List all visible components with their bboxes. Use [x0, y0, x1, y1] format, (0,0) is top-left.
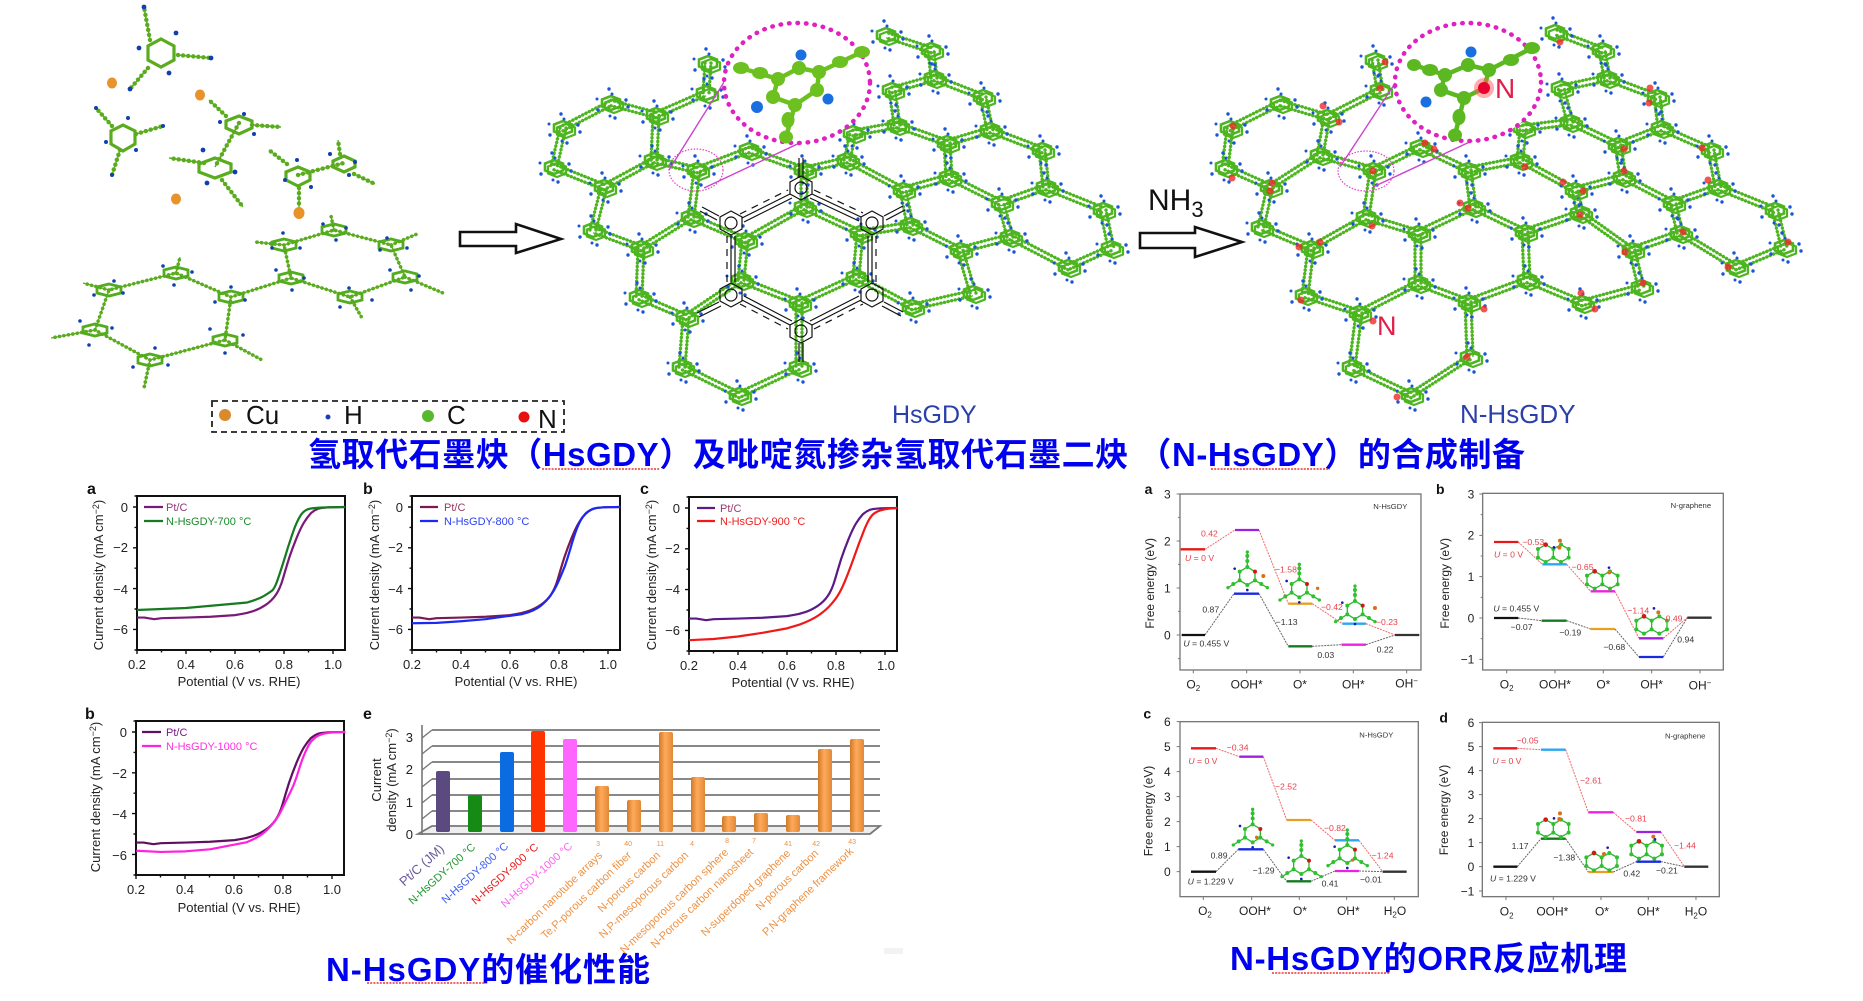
chart c: N-HsGDY-900: −2 [665, 541, 680, 556]
chart e: 3D bar chart: −2 [384, 733, 394, 743]
reaction arrow 2 [1140, 227, 1242, 257]
energy diagram d: N-graphene U=1.229 V: 4 [1468, 764, 1475, 778]
chart a: N-HsGDY-700: 0.8 [275, 657, 293, 672]
energy diagram a: N-HsGDY U=0.455 V: −0.42 [1321, 602, 1343, 612]
chart b (lower): N-HsGDY-1000: N-HsGDY-1000 °C [166, 741, 257, 753]
energy diagram a: N-HsGDY U=0.455 V: U = 0 V [1185, 553, 1214, 563]
chart a: N-HsGDY-700: 0.2 [128, 657, 146, 672]
chart b: N-HsGDY-800: 1.0 [599, 657, 617, 672]
energy diagram d: N-graphene U=1.229 V: 5 [1468, 740, 1475, 754]
energy diagram b: N-graphene U=0.455 V: 2 [1509, 684, 1514, 693]
chart b (lower): N-HsGDY-1000: 0.4 [176, 882, 194, 897]
chart a: N-HsGDY-700: −4 [113, 582, 128, 597]
chart e category labels: N-porous carbon [754, 848, 821, 913]
energy diagram d: N-graphene U=1.229 V: Free energy (eV) [1437, 765, 1451, 855]
HsGDY network [538, 19, 1130, 412]
energy diagram c: N-HsGDY U=1.229 V: −1.29 [1253, 865, 1275, 875]
chart b (lower): N-HsGDY-1000: −2 [112, 766, 127, 781]
energy diagram c: N-HsGDY U=1.229 V: c [1143, 706, 1151, 722]
energy diagram b: N-graphene U=0.455 V: N-graphene [1671, 501, 1711, 510]
energy diagram d: N-graphene U=1.229 V: 1 [1468, 836, 1475, 850]
chart e category labels: 42 [812, 841, 820, 848]
chart e: 3D bar chart: density (mA cm [384, 743, 399, 832]
energy diagram d: N-graphene U=1.229 V: −1.38 [1553, 852, 1575, 862]
chart b (lower): N-HsGDY-1000: Current density (mA cm [88, 736, 103, 872]
energy diagram b: N-graphene U=0.455 V: 0.49 [1666, 614, 1683, 624]
chart c: N-HsGDY-900: Potential (V vs. RHE) [732, 675, 854, 690]
chart b: N-HsGDY-800: 0.6 [501, 657, 519, 672]
energy diagram d: N-graphene U=1.229 V: −2.61 [1580, 775, 1602, 785]
main title: 氢取代石墨炔（HsGDY）及吡啶氮掺杂氢取代石墨二炔 （N-HsGDY）的合成制备 [308, 436, 1525, 473]
chart b (lower): N-HsGDY-1000: b [85, 706, 95, 723]
energy diagram c: N-HsGDY U=1.229 V: 3 [1164, 790, 1171, 804]
chart e category labels [396, 838, 856, 956]
chart b: N-HsGDY-800: −2 [388, 540, 403, 555]
chart e category labels: N-HsGDY-1000 °C [499, 840, 575, 910]
black bond skeleton overlay [697, 158, 905, 362]
energy diagram c: N-HsGDY U=1.229 V: −0.82 [1324, 823, 1346, 833]
energy diagram d: N-graphene U=1.229 V [1437, 710, 1719, 920]
energy diagram c: N-HsGDY U=1.229 V: U = 1.229 V [1188, 876, 1234, 886]
faint smudge [884, 948, 903, 954]
chart b (lower): N-HsGDY-1000: 1.0 [323, 882, 341, 897]
chart e: 3D bar chart: 0 [406, 827, 413, 842]
energy diagram c: N-HsGDY U=1.229 V: 1 [1164, 840, 1171, 854]
energy diagram a: N-HsGDY U=0.455 V: 0.03 [1317, 650, 1334, 660]
energy diagram b: N-graphene U=0.455 V: −1 [1461, 653, 1475, 667]
energy diagram d: N-graphene U=1.229 V: d [1439, 710, 1448, 726]
chart b: N-HsGDY-800: Current density (mA cm [367, 514, 382, 650]
chart b: N-HsGDY-800: N-HsGDY-800 °C [444, 516, 529, 528]
chart c: N-HsGDY-900: −4 [665, 582, 680, 597]
energy diagram d: N-graphene U=1.229 V: 3 [1468, 788, 1475, 802]
chart a: N-HsGDY-700: Current density (mA cm [91, 514, 106, 650]
energy diagram c: N-HsGDY U=1.229 V: 2 [1164, 815, 1171, 829]
chart c: N-HsGDY-900 [640, 481, 897, 690]
energy diagram b: N-graphene U=0.455 V: 1 [1468, 570, 1475, 584]
chart e category labels: 7 [752, 838, 756, 845]
energy diagram b: N-graphene U=0.455 V: −0.07 [1511, 622, 1533, 632]
energy diagram c: N-HsGDY U=1.229 V: 6 [1164, 715, 1171, 729]
energy diagram b: N-graphene U=0.455 V: −0.65 [1572, 562, 1594, 572]
energy diagram d: N-graphene U=1.229 V: O [1698, 905, 1707, 919]
energy diagram d: N-graphene U=1.229 V: O [1500, 905, 1509, 919]
chart a: N-HsGDY-700: Pt/C [166, 502, 187, 514]
chart e: 3D bar chart: ) [384, 728, 399, 733]
chart a: N-HsGDY-700: 0 [121, 500, 128, 515]
energy diagram a: N-HsGDY U=0.455 V: − [1413, 676, 1418, 685]
energy diagram c: N-HsGDY U=1.229 V: O [1397, 904, 1406, 918]
reaction arrow 1 [460, 224, 561, 253]
energy diagram c: N-HsGDY U=1.229 V: −0.34 [1227, 743, 1249, 753]
chart e category labels: 4 [690, 841, 694, 848]
energy diagram b: N-graphene U=0.455 V: Free energy (eV) [1438, 538, 1452, 629]
chart b (lower): N-HsGDY-1000: ) [88, 722, 103, 726]
chart e: 3D bar chart [363, 706, 880, 956]
chart b: N-HsGDY-800: Pt/C [444, 502, 465, 514]
legend box: atoms [212, 400, 564, 434]
legend box: atoms: Cu [246, 400, 279, 430]
chart c: N-HsGDY-900: ) [644, 500, 659, 504]
energy diagram b: N-graphene U=0.455 V: 0 [1468, 611, 1475, 625]
zoom callout: N-HsGDY monomer: N [1495, 73, 1515, 104]
chart b: N-HsGDY-800: 0.2 [403, 657, 421, 672]
energy diagram a: N-HsGDY U=0.455 V: OH* [1342, 677, 1365, 691]
NH3 reagent label: 3 [1191, 197, 1204, 222]
chart e gridlines and floor [418, 725, 880, 835]
chart b (lower): N-HsGDY-1000: 0.6 [225, 882, 243, 897]
chart a: N-HsGDY-700: Potential (V vs. RHE) [178, 674, 300, 689]
chart e category labels: Te,P-porous carbon fiber [539, 849, 634, 942]
label: N-HsGDY: N-HsGDY [1460, 399, 1576, 429]
chart e: 3D bar chart: Current [369, 758, 384, 802]
chart e category labels: 3 [596, 841, 600, 848]
energy diagram a: N-HsGDY U=0.455 V: N-HsGDY [1373, 502, 1407, 511]
chart e category labels: N-HsGDY-800 °C [440, 840, 511, 906]
heading: catalytic performance: N-HsGDY的催化性能 [326, 951, 650, 988]
chart b: N-HsGDY-800 [363, 481, 620, 689]
chart e category labels: N-mesoporous carbon sphere [618, 847, 731, 956]
chart e category labels: N-porous carbon [596, 850, 663, 915]
energy diagram a: N-HsGDY U=0.455 V: 2 [1196, 684, 1201, 693]
energy diagram c: N-HsGDY U=1.229 V: O* [1293, 904, 1307, 918]
energy diagram a: N-HsGDY U=0.455 V: O* [1293, 677, 1307, 691]
energy diagram d: N-graphene U=1.229 V: 1.17 [1512, 841, 1529, 851]
chart e category labels: N-Porous carbon nanosheet [649, 847, 756, 951]
chart b (lower): N-HsGDY-1000 [85, 706, 345, 915]
energy diagram c: N-HsGDY U=1.229 V: 0 [1164, 865, 1171, 879]
legend box: atoms: H [344, 400, 363, 430]
chart b (lower): N-HsGDY-1000: Potential (V vs. RHE) [178, 900, 300, 915]
energy diagram b: N-graphene U=0.455 V: −0.68 [1603, 642, 1625, 652]
energy diagram c: N-HsGDY U=1.229 V: 4 [1164, 765, 1171, 779]
energy diagram c: N-HsGDY U=1.229 V: O [1198, 904, 1207, 918]
energy diagram b: N-graphene U=0.455 V: −0.19 [1559, 628, 1581, 638]
chart e: 3D bar chart: 1 [406, 795, 413, 810]
energy diagram d: N-graphene U=1.229 V: 2 [1468, 812, 1475, 826]
energy diagram a: N-HsGDY U=0.455 V: −1.13 [1276, 617, 1298, 627]
energy diagram c: N-HsGDY U=1.229 V: −0.01 [1360, 874, 1382, 884]
energy diagram b: N-graphene U=0.455 V: U = 0.455 V [1493, 603, 1540, 613]
chart b (lower): N-HsGDY-1000: 0 [120, 725, 127, 740]
energy diagram a: N-HsGDY U=0.455 V: −1.58 [1275, 565, 1297, 575]
chart c: N-HsGDY-900: 0.2 [680, 658, 698, 673]
chart b: N-HsGDY-800: 0.4 [452, 657, 470, 672]
chart b: N-HsGDY-800: Potential (V vs. RHE) [455, 674, 577, 689]
energy diagram d: N-graphene U=1.229 V: −0.05 [1517, 736, 1539, 746]
chart e category labels: N-HsGDY-700 °C [407, 841, 478, 907]
energy diagram c: N-HsGDY U=1.229 V: −2.52 [1275, 781, 1297, 791]
energy diagram b: N-graphene U=0.455 V: O [1500, 677, 1509, 691]
chart b: N-HsGDY-800: 0.8 [550, 657, 568, 672]
energy diagram d: N-graphene U=1.229 V: −1.44 [1674, 841, 1696, 851]
energy diagram c: N-HsGDY U=1.229 V: 5 [1164, 740, 1171, 754]
chart c: N-HsGDY-900: −6 [665, 623, 680, 638]
chart b: N-HsGDY-800: −4 [388, 582, 403, 597]
chart b (lower): N-HsGDY-1000: Pt/C [166, 727, 187, 739]
chart c: N-HsGDY-900: 0.4 [729, 658, 747, 673]
energy diagram d: N-graphene U=1.229 V: OOH* [1536, 905, 1569, 919]
chart e: 3D bar chart: 2 [406, 762, 413, 777]
energy diagram b: N-graphene U=0.455 V [1436, 481, 1723, 693]
zoom callout: HsGDY monomer [669, 23, 870, 191]
energy diagram b: N-graphene U=0.455 V: − [1707, 678, 1712, 687]
N-HsGDY network [1210, 16, 1803, 412]
chart c: N-HsGDY-900: c [640, 481, 649, 498]
energy diagram c: N-HsGDY U=1.229 V: OH* [1337, 904, 1360, 918]
chart b (lower): N-HsGDY-1000: −6 [112, 848, 127, 863]
energy diagram a: N-HsGDY U=0.455 V [1143, 481, 1421, 693]
energy diagram d: N-graphene U=1.229 V: −0.21 [1656, 865, 1678, 875]
energy diagram a: N-HsGDY U=0.455 V: Free energy (eV) [1143, 538, 1157, 629]
chart a: N-HsGDY-700: −2 [91, 504, 101, 514]
chart e category labels: N,P-mesoporous carbon [597, 850, 691, 941]
chart b: N-HsGDY-800: 0 [396, 500, 403, 515]
energy diagram d: N-graphene U=1.229 V: N-graphene [1665, 732, 1705, 741]
energy diagram c: N-HsGDY U=1.229 V: 2 [1207, 911, 1212, 920]
zoom callout: N-HsGDY monomer [1338, 23, 1541, 191]
NH3 reagent label: NH [1148, 184, 1191, 217]
chart c: N-HsGDY-900: 0.8 [827, 658, 845, 673]
energy diagram b: N-graphene U=0.455 V: OOH* [1539, 677, 1571, 691]
energy diagram d: N-graphene U=1.229 V: U = 0 V [1492, 756, 1522, 766]
chart b: N-HsGDY-800: −2 [367, 504, 377, 514]
energy diagram c: N-HsGDY U=1.229 V: H [1384, 904, 1392, 918]
chart b (lower): N-HsGDY-1000: 0.8 [274, 882, 292, 897]
energy diagram c: N-HsGDY U=1.229 V: 0.89 [1211, 850, 1228, 860]
energy diagram a: N-HsGDY U=0.455 V: 1 [1164, 581, 1171, 595]
chart a: N-HsGDY-700: −2 [113, 540, 128, 555]
energy diagram a: N-HsGDY U=0.455 V: −0.23 [1376, 617, 1398, 627]
heading: ORR mechanism: N-HsGDY的ORR反应机理 [1230, 940, 1627, 977]
chart b: N-HsGDY-800: ) [367, 500, 382, 504]
chart b: N-HsGDY-800: b [363, 481, 373, 498]
energy diagram a: N-HsGDY U=0.455 V: 0 [1164, 628, 1171, 642]
label: N atom: N [1377, 311, 1396, 341]
chart c: N-HsGDY-900: 1.0 [877, 658, 895, 673]
energy diagram d: N-graphene U=1.229 V: 0 [1468, 860, 1475, 874]
energy diagram c: N-HsGDY U=1.229 V: Free energy (eV) [1142, 766, 1156, 856]
energy diagram b: N-graphene U=0.455 V: 0.94 [1677, 635, 1694, 645]
legend box: atoms: C [447, 400, 466, 430]
energy diagram b: N-graphene U=0.455 V: OH [1689, 678, 1707, 692]
chart b (lower): N-HsGDY-1000: −2 [88, 726, 98, 736]
energy diagram a: N-HsGDY U=0.455 V: 0.22 [1377, 644, 1394, 654]
energy diagram d: N-graphene U=1.229 V: 2 [1693, 911, 1698, 920]
energy diagram a: N-HsGDY U=0.455 V: O [1186, 677, 1196, 691]
energy diagram a: N-HsGDY U=0.455 V: 3 [1164, 487, 1171, 501]
energy diagram c: N-HsGDY U=1.229 V: N-HsGDY [1359, 731, 1393, 740]
chart c: N-HsGDY-900: Pt/C [720, 503, 741, 515]
chart e: 3D bar chart: 3 [406, 730, 413, 745]
oligomer chain [51, 216, 443, 388]
energy diagram b: N-graphene U=0.455 V: −1.14 [1627, 605, 1649, 615]
energy diagram b: N-graphene U=0.455 V: U = 0 V [1494, 549, 1523, 559]
energy diagram a: N-HsGDY U=0.455 V: 0.87 [1202, 605, 1219, 615]
chart e category labels: 43 [848, 839, 856, 846]
energy diagram a: N-HsGDY U=0.455 V: U = 0.455 V [1183, 639, 1230, 649]
energy diagram d: N-graphene U=1.229 V: O* [1595, 905, 1609, 919]
chart b (lower): N-HsGDY-1000: 0.2 [127, 882, 145, 897]
energy diagram d: N-graphene U=1.229 V: 0.42 [1623, 869, 1640, 879]
chart e category labels: N-superdoped graphene [699, 848, 793, 939]
energy diagram a: N-HsGDY U=0.455 V: a [1145, 481, 1153, 497]
chart e category labels: Pt/C (JM) [396, 841, 447, 889]
energy diagram b: N-graphene U=0.455 V: 2 [1468, 529, 1475, 543]
chart e category labels: 41 [784, 841, 792, 848]
energy diagram a: N-HsGDY U=0.455 V: OH [1395, 676, 1413, 690]
chart b (lower): N-HsGDY-1000: −4 [112, 807, 127, 822]
chart e category labels: N-carbon nanotube arrays [505, 849, 605, 947]
chart a: N-HsGDY-700: 0.6 [226, 657, 244, 672]
energy diagram c: N-HsGDY U=1.229 V: 0.41 [1322, 879, 1339, 889]
chart c: N-HsGDY-900: −2 [644, 504, 654, 514]
energy diagram c: N-HsGDY U=1.229 V: OOH* [1239, 904, 1271, 918]
label: HsGDY: HsGDY [892, 401, 977, 429]
chart a: N-HsGDY-700: 0.4 [177, 657, 195, 672]
energy diagram d: N-graphene U=1.229 V: H [1685, 905, 1693, 919]
precursor molecules and copper atoms [94, 5, 375, 219]
energy diagram a: N-HsGDY U=0.455 V: 0.42 [1201, 529, 1218, 539]
chart b: N-HsGDY-800: −6 [388, 622, 403, 637]
chart c: N-HsGDY-900: 0.6 [778, 658, 796, 673]
energy diagram b: N-graphene U=0.455 V: b [1436, 481, 1445, 497]
chart e bars [436, 731, 864, 832]
energy diagram b: N-graphene U=0.455 V: OH* [1640, 677, 1663, 691]
energy diagram c: N-HsGDY U=1.229 V: U = 0 V [1188, 756, 1218, 766]
chart e category labels: 11 [657, 841, 664, 848]
energy diagram d: N-graphene U=1.229 V: 6 [1468, 716, 1475, 730]
energy diagram c: N-HsGDY U=1.229 V: 2 [1392, 911, 1397, 920]
energy diagram b: N-graphene U=0.455 V: 3 [1468, 487, 1475, 501]
chart e category labels: P,N-graphene framework [760, 845, 856, 939]
chart a: N-HsGDY-700: 1.0 [324, 657, 342, 672]
chart a: N-HsGDY-700 [87, 481, 345, 689]
chart c: N-HsGDY-900: 0 [673, 501, 680, 516]
chart a: N-HsGDY-700: ) [91, 500, 106, 504]
chart e category labels: N-HsGDY-900 °C [470, 841, 541, 907]
chart e: 3D bar chart: e [363, 706, 372, 723]
energy diagram d: N-graphene U=1.229 V: 2 [1509, 911, 1514, 920]
energy diagram a: N-HsGDY U=0.455 V: 2 [1164, 534, 1171, 548]
energy diagram b: N-graphene U=0.455 V: O* [1596, 677, 1611, 691]
energy diagram b: N-graphene U=0.455 V: −0.53 [1522, 537, 1544, 547]
chart c: N-HsGDY-900: Current density (mA cm [644, 514, 659, 650]
chart e category labels: 8 [725, 838, 729, 845]
energy diagram d: N-graphene U=1.229 V: −0.81 [1625, 813, 1647, 823]
chart e category labels: 40 [624, 841, 632, 848]
chart a: N-HsGDY-700: a [87, 481, 96, 498]
chart a: N-HsGDY-700: N-HsGDY-700 °C [166, 516, 251, 528]
chart a: N-HsGDY-700: −6 [113, 622, 128, 637]
legend box: atoms: N [538, 404, 557, 434]
energy diagram d: N-graphene U=1.229 V: OH* [1637, 905, 1660, 919]
energy diagram a: N-HsGDY U=0.455 V: OOH* [1231, 677, 1263, 691]
chart c: N-HsGDY-900: N-HsGDY-900 °C [720, 516, 805, 528]
energy diagram c: N-HsGDY U=1.229 V: −1.24 [1372, 850, 1394, 860]
energy diagram d: N-graphene U=1.229 V: −1 [1461, 884, 1475, 898]
energy diagram d: N-graphene U=1.229 V: U = 1.229 V [1490, 874, 1536, 884]
energy diagram c: N-HsGDY U=1.229 V [1142, 706, 1418, 920]
